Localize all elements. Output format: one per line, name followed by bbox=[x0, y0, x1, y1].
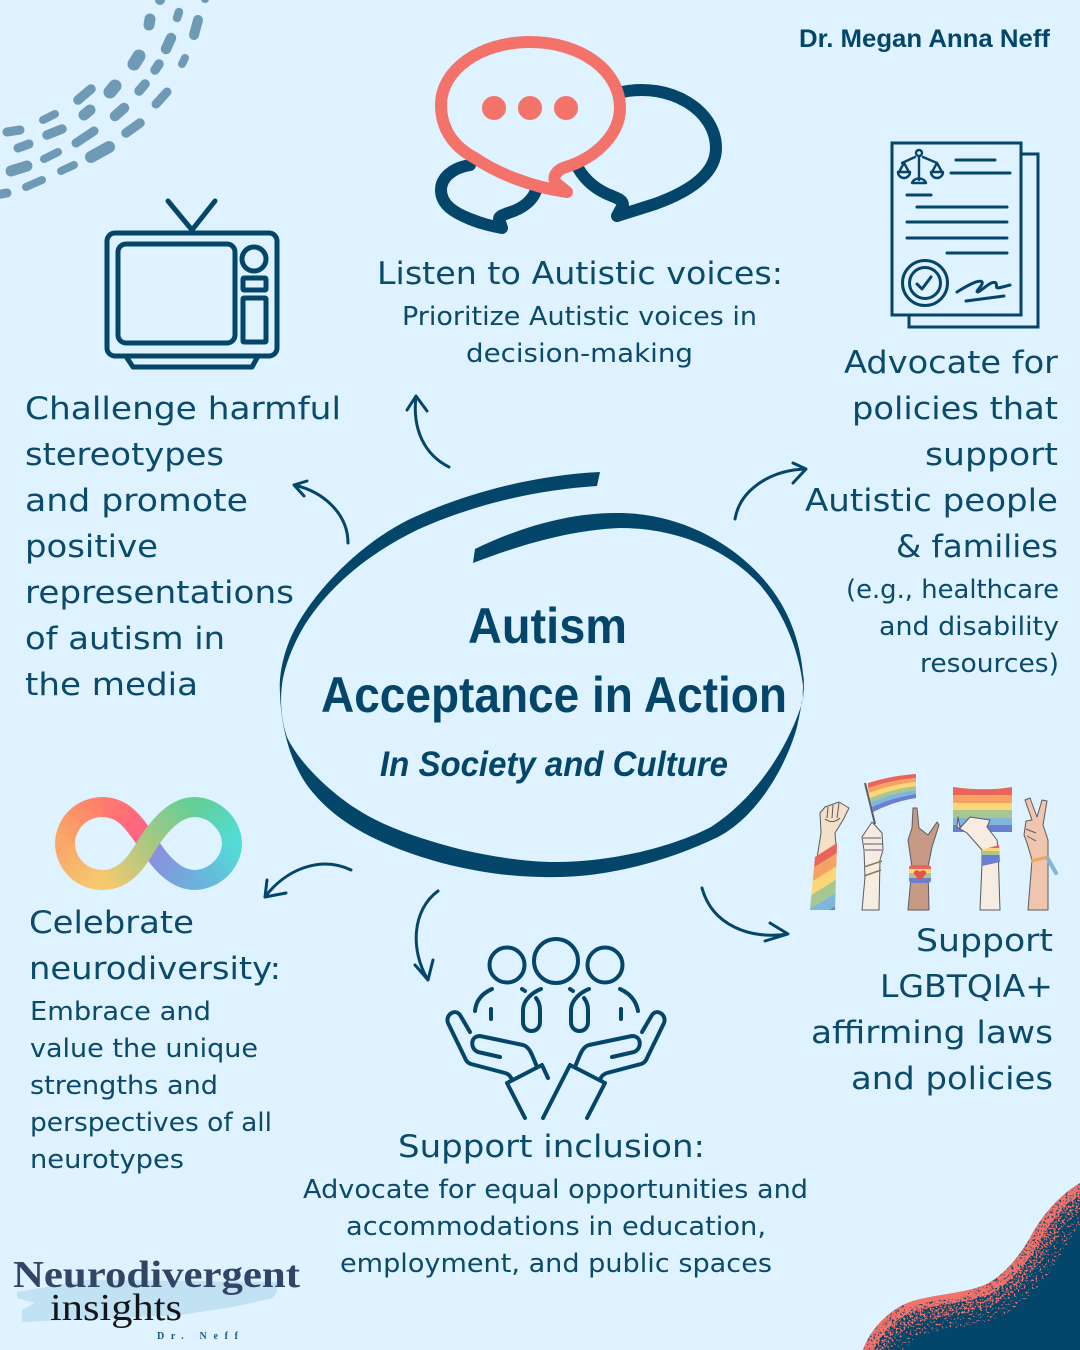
hand-drawn circle around title bbox=[280, 472, 804, 877]
text: advocate for policies bbox=[805, 345, 1059, 679]
text: advocate for policies: policies that bbox=[852, 391, 1058, 427]
text: support LGBTQIA+ bbox=[811, 923, 1053, 1097]
logo: Neurodivergent insights: Dr. Neff bbox=[157, 1331, 239, 1342]
left navy bubble bbox=[441, 165, 537, 228]
text: challenge harmful stereotypes: the media bbox=[25, 667, 198, 703]
text: challenge harmful stereotypes: stereotypes bbox=[25, 437, 224, 473]
logo: Neurodivergent insights bbox=[13, 1254, 300, 1342]
text: advocate for policies: Advocate for bbox=[844, 345, 1058, 381]
text: advocate for policies: (e.g., healthcare bbox=[846, 575, 1059, 605]
arrow: to listen bbox=[407, 396, 449, 467]
text: listen to Autistic voices: decision-making bbox=[466, 339, 693, 369]
icon: television bbox=[107, 201, 277, 367]
text: support inclusion: Advocate for equal opportunities and bbox=[303, 1175, 808, 1205]
decorative dashes: top-left bbox=[0, 0, 205, 195]
text: challenge harmful stereotypes: of autism in bbox=[25, 621, 225, 657]
arrow: to advocate bbox=[735, 463, 806, 519]
text: challenge harmful stereotypes: positive bbox=[25, 529, 158, 565]
text: advocate for policies: support bbox=[925, 437, 1058, 473]
title block: Acceptance in Action bbox=[321, 667, 787, 723]
text: listen to Autistic voices: Listen to Autistic voices: bbox=[377, 256, 783, 292]
logo: Neurodivergent insights: insights bbox=[50, 1287, 182, 1329]
text: listen to Autistic voices: Prioritize Autistic voices in bbox=[402, 302, 757, 332]
text: celebrate neurodiversity: perspectives of all bbox=[30, 1108, 272, 1138]
brown hand with heart band bbox=[908, 808, 939, 910]
left hand bbox=[447, 1012, 537, 1080]
icon: speech bubbles bbox=[441, 42, 716, 228]
right navy bubble bbox=[578, 90, 716, 216]
text: support inclusion: employment, and public spaces bbox=[340, 1249, 772, 1279]
text: support LGBTQIA+: Support bbox=[916, 923, 1053, 959]
peace-sign hand bbox=[1024, 798, 1056, 910]
author credit: Dr. Megan Anna Neff bbox=[799, 25, 1051, 53]
text: support LGBTQIA+: affirming laws bbox=[811, 1015, 1053, 1051]
arrow: to LGBTQIA+ bbox=[702, 888, 788, 941]
arrow: to challenge stereotypes bbox=[294, 481, 348, 543]
text: celebrate neurodiversity: Celebrate bbox=[29, 905, 194, 941]
three dots bbox=[482, 96, 578, 120]
title block: Autism bbox=[468, 598, 627, 654]
text: challenge harmful stereotypes bbox=[25, 391, 341, 703]
text: challenge harmful stereotypes: Challenge harmful bbox=[25, 391, 341, 427]
text: celebrate neurodiversity: neurotypes bbox=[30, 1145, 184, 1175]
text: advocate for policies: and disability bbox=[879, 612, 1059, 642]
text: advocate for policies: Autistic people bbox=[805, 483, 1058, 519]
text: celebrate neurodiversity: Embrace and bbox=[30, 997, 211, 1027]
text: support inclusion: accommodations in education, bbox=[346, 1212, 766, 1242]
arrow: to inclusion bbox=[415, 891, 438, 980]
text: support LGBTQIA+: and policies bbox=[851, 1061, 1053, 1097]
title block bbox=[321, 598, 787, 784]
text: listen to Autistic voices bbox=[377, 256, 783, 369]
scales of justice bbox=[898, 150, 943, 183]
text: celebrate neurodiversity: strengths and bbox=[30, 1071, 218, 1101]
arrow: to celebrate bbox=[265, 864, 351, 897]
icon: rainbow infinity bbox=[65, 807, 232, 880]
icon: legal document bbox=[892, 143, 1038, 327]
text: support LGBTQIA+: LGBTQIA+ bbox=[880, 969, 1053, 1005]
arm with rainbow sleeve bbox=[810, 802, 850, 910]
text: advocate for policies: & families bbox=[896, 529, 1058, 565]
coral bubble bbox=[441, 42, 620, 192]
title block: In Society and Culture bbox=[380, 745, 728, 784]
text: challenge harmful stereotypes: representations bbox=[25, 575, 294, 611]
text: advocate for policies: resources) bbox=[920, 649, 1059, 679]
text: challenge harmful stereotypes: and promote bbox=[25, 483, 248, 519]
seal with check bbox=[902, 260, 948, 306]
hand holding large flag bbox=[953, 787, 1012, 910]
text: celebrate neurodiversity: value the unique bbox=[30, 1034, 258, 1064]
text: support inclusion: Support inclusion: bbox=[398, 1129, 705, 1165]
right hand bbox=[575, 1012, 665, 1080]
text: celebrate neurodiversity bbox=[29, 905, 281, 1175]
logo: Neurodivergent insights: Neurodivergent bbox=[13, 1254, 300, 1296]
text: support inclusion bbox=[303, 1129, 808, 1279]
icon: hands holding people bbox=[447, 939, 665, 1118]
hand holding small flag bbox=[862, 774, 916, 910]
text: celebrate neurodiversity: neurodiversity: bbox=[29, 951, 281, 987]
icon: raised hands with pride flags bbox=[810, 774, 1058, 910]
signature bbox=[957, 281, 1010, 301]
corner blob: speckled navy and coral bbox=[860, 1180, 1080, 1350]
